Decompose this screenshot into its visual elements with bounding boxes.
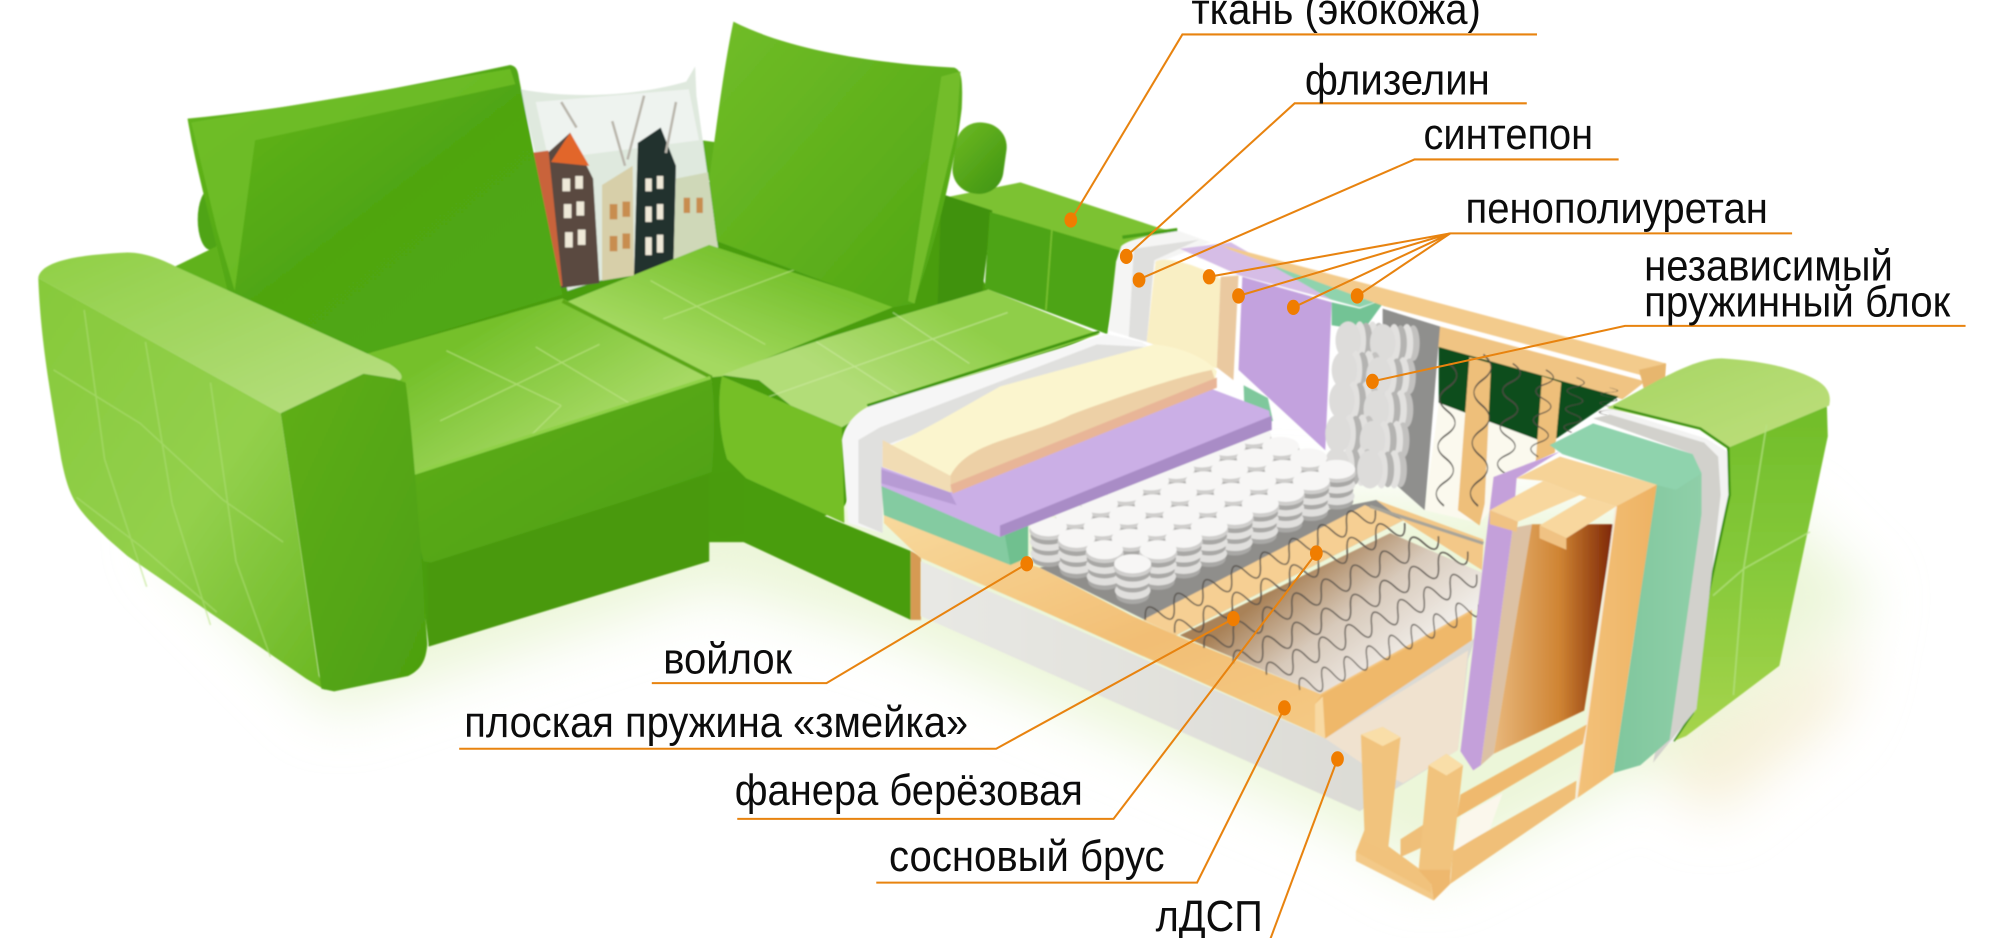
right section layered foam [1550,409,1728,773]
floor shadow [153,485,1875,880]
back cushion left [188,65,562,353]
label: войлок: войлок [663,635,793,683]
label: синтепон: синтепон [1423,111,1593,159]
sofa: green upholstered body [38,22,1180,691]
wood bottom frame [1356,724,1587,901]
back cushion right [709,22,962,307]
label: фанера берёзовая: фанера берёзовая [735,767,1083,815]
seat 3 [719,290,1099,620]
label: независимый пружинный блок [1366,243,1966,389]
frame and springs at the back wall [1221,245,1666,526]
label: плоская пружина «змейка»: плоская пружина «змейка» [464,699,968,747]
seat 2 [562,245,895,378]
seat 1 [364,298,744,647]
label: флизелин: флизелин [1305,56,1490,104]
right armrest green shell [1607,358,1830,741]
small bolster and back seat edge [172,140,721,332]
fabric and interlining bands [842,332,1154,533]
dark backing between cushions [230,179,1097,644]
back corner of frame [1639,364,1666,395]
pocket springs [1029,425,1356,604]
label: пенополиуретан: пенополиуретан [1466,185,1768,233]
label: флизелин [1120,56,1527,264]
label: синтепон [1133,111,1619,288]
wood seat frame [884,500,1483,739]
cut-away: right end section [1356,358,1830,901]
side-view independent spring stacks [1324,321,1420,489]
vertical layers at the back [1108,230,1386,450]
LDSP side panel [921,561,1476,811]
label: лДСП [1156,751,1344,938]
left armrest [38,253,427,691]
label: сосновый брус [876,700,1291,883]
label: плоская пружина «змейка» [459,611,1240,749]
label: ткань (экокожа) [1064,0,1537,228]
cut-away: seat layers [842,230,1666,811]
label: независимый пружинный блок: независимый [1644,243,1893,291]
label: сосновый брус: сосновый брус [889,833,1165,881]
back arm and bolster [938,119,1180,334]
label: пенополиуретан [1203,185,1792,315]
seat foam and padding layers [881,344,1273,565]
label: войлок [652,556,1033,683]
label: фанера берёзовая [735,545,1323,819]
label: независимый пружинный блок: пружинный блок [1644,278,1951,326]
decorative pillow [520,66,718,291]
wood end frame [1460,452,1657,798]
flat zigzag springs [1141,501,1483,699]
